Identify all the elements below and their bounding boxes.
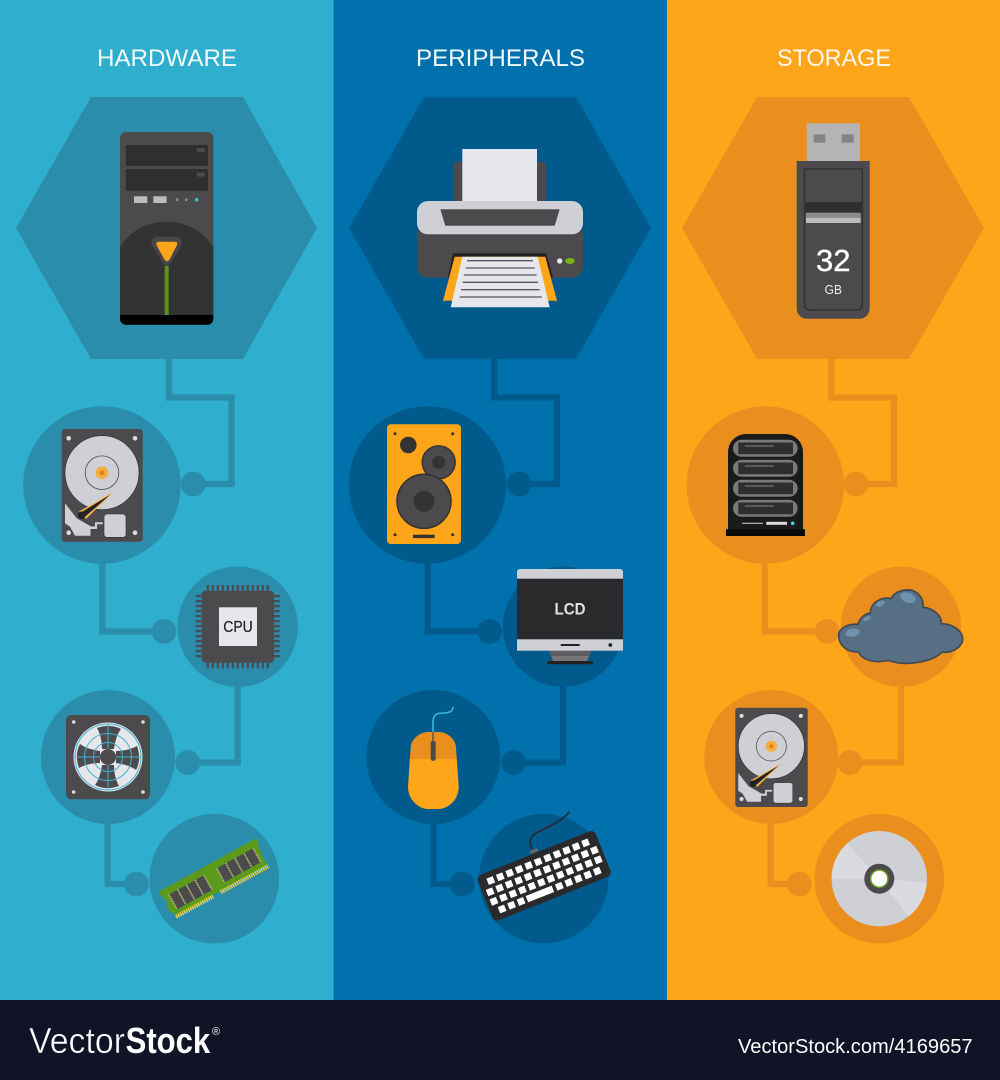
LCD label: LCD <box>554 599 586 618</box>
icon: cloud <box>839 590 963 663</box>
heading: storage: STORAGE <box>777 45 891 72</box>
icon: optical disc <box>832 831 927 926</box>
panel: peripherals <box>334 0 667 1000</box>
logo: VectorStock: ® <box>212 1026 220 1038</box>
icon: mouse <box>408 707 459 809</box>
hexagon: storage <box>682 97 984 359</box>
icon: PC tower <box>120 132 213 325</box>
panel: hardware <box>0 0 334 1000</box>
capacity number: 32 <box>816 243 851 278</box>
circles: storage <box>687 406 961 944</box>
connectors: storage <box>765 359 901 884</box>
peripherals background <box>334 0 667 1000</box>
icon: printer <box>417 149 583 307</box>
hexagon: hardware <box>16 97 317 359</box>
logo: VectorStock: Vector <box>29 1020 125 1061</box>
icon: cooling fan <box>66 715 150 799</box>
footer reference text: VectorStock.com/4169657 <box>738 1036 973 1058</box>
logo: VectorStock: Stock <box>126 1020 211 1061</box>
hexagon: peripherals <box>349 97 651 359</box>
logo: VectorStock <box>29 1020 220 1061</box>
storage background <box>667 0 1000 1000</box>
heading: peripherals: PERIPHERALS <box>416 45 585 72</box>
icon: hard disk drive <box>735 708 808 807</box>
heading: hardware: HARDWARE <box>97 45 237 72</box>
icon: LCD monitor <box>517 569 623 664</box>
footer bar <box>0 1000 1000 1080</box>
icon: speaker <box>387 424 461 544</box>
panel: storage <box>667 0 1000 1000</box>
CPU label: CPU <box>223 619 253 636</box>
icon: NAS storage server <box>726 434 805 536</box>
hardware background <box>0 0 334 1000</box>
capacity unit: GB <box>825 283 842 297</box>
connector dots: hardware <box>124 472 206 896</box>
connector dots: storage <box>787 472 868 896</box>
circles: peripherals <box>349 406 623 944</box>
icon: hard disk drive <box>62 429 143 542</box>
circles: hardware <box>23 406 298 944</box>
icon: CPU chip <box>198 588 277 666</box>
icon: USB flash drive <box>797 123 870 319</box>
icon: keyboard <box>476 812 612 922</box>
connector dots: peripherals <box>450 472 531 896</box>
icon: RAM module <box>159 838 271 918</box>
connectors: hardware <box>102 359 238 884</box>
connectors: peripherals <box>428 359 563 884</box>
